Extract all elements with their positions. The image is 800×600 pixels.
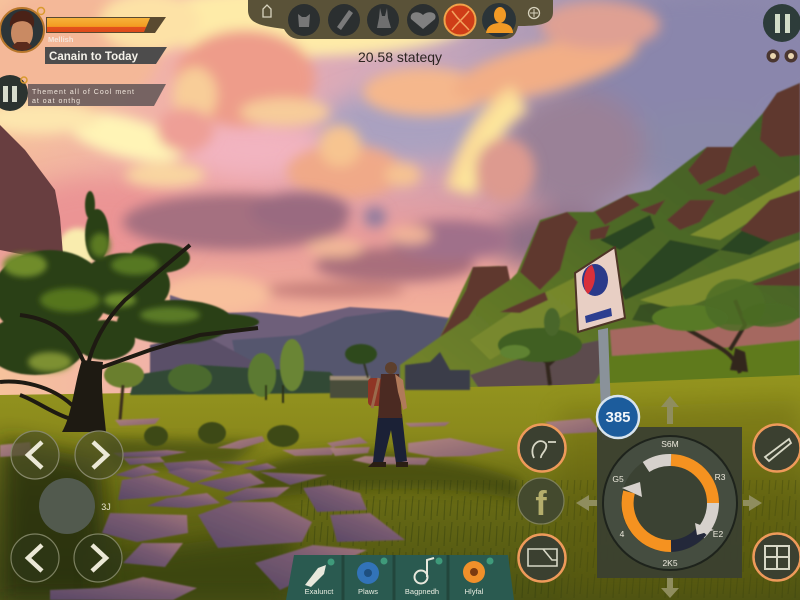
tab: explore (305, 558, 334, 596)
banner (28, 84, 166, 106)
distance marker: 385 (605, 409, 631, 426)
minimap labels: S6M (661, 439, 679, 449)
small tree mid distance (498, 308, 582, 385)
button: map (518, 534, 566, 582)
tab: explore: Exalunct (305, 587, 334, 596)
tab: settings: Hlyfal (465, 587, 484, 596)
icon: rabbit (367, 4, 399, 36)
tab: plans (357, 558, 388, 596)
tree right on hillside (652, 279, 798, 373)
action buttons (518, 424, 800, 582)
pause objective banner (0, 75, 166, 111)
button: gift box (754, 534, 800, 580)
player character (368, 362, 408, 467)
button: f: f (535, 485, 547, 523)
ring: orange upper right (671, 460, 713, 503)
circular minimap panel (597, 427, 742, 578)
icon: profile (482, 3, 516, 37)
distant blue mountains (150, 295, 450, 385)
button: vine (518, 424, 566, 472)
minimap labels: 2K5 (662, 558, 678, 568)
icon: close active (444, 4, 476, 36)
top right pause button (763, 4, 800, 42)
large foreground tree (0, 191, 259, 432)
icon: knife (328, 4, 360, 36)
button: right upper (75, 431, 123, 479)
ring: navy bottom (671, 531, 702, 546)
joystick value: 3J (101, 502, 111, 512)
tab: music (405, 558, 442, 596)
minimap labels: R3 (715, 472, 726, 482)
left rock cliff (0, 125, 63, 260)
ring: grey top (646, 460, 671, 467)
right mountain range (400, 83, 800, 392)
small top right badges (766, 50, 798, 62)
stone path (0, 418, 600, 600)
minimap labels: G5 (612, 474, 624, 484)
icon: plus badge (528, 8, 540, 18)
tab: music: Bagpnedh (405, 587, 439, 596)
grass tufts (144, 422, 299, 447)
virtual d-pad (11, 431, 123, 582)
arrow: grey left (622, 482, 642, 497)
banner: at oat onthg (32, 98, 80, 105)
banner: Thement all of Cool ment (32, 89, 134, 96)
minimap directional arrows (576, 396, 762, 598)
top navigation bar (248, 0, 553, 39)
pause icon left (0, 75, 28, 111)
joystick (39, 478, 95, 534)
foliage dark mass (0, 191, 259, 375)
bottom menu tabs (286, 555, 514, 600)
sky with sunset clouds (0, 0, 800, 400)
button: right lower (74, 534, 122, 582)
sign post (575, 247, 625, 440)
button: left lower (11, 534, 59, 582)
minimap labels: 4 (620, 529, 625, 539)
distance marker (597, 396, 639, 438)
status banner: Canain to Today (49, 51, 139, 63)
portrait (0, 8, 44, 52)
icon: house (263, 5, 271, 17)
icon: shirt (288, 4, 320, 36)
arrow: grey right (695, 523, 714, 535)
minimap labels (612, 439, 726, 568)
player label: Mellish (48, 35, 74, 44)
ring: orange lower left (628, 492, 671, 546)
button: left upper (11, 431, 59, 479)
minimap labels: E2 (713, 529, 723, 539)
center status text: 20.58 stateqy (358, 49, 442, 65)
meadow ground (0, 375, 800, 600)
player portrait with health bars (0, 8, 167, 64)
distant trees and buildings (104, 339, 470, 420)
button: f (518, 478, 564, 524)
button: ruler (754, 424, 800, 472)
foliage leaf highlights (3, 233, 200, 372)
ring: grey right (700, 503, 713, 534)
tab: plans: Plaws (358, 587, 378, 596)
trunk and branches (62, 360, 106, 432)
tab: settings (463, 558, 494, 596)
health bar (46, 17, 166, 33)
icon: heart (407, 4, 439, 36)
status banner (45, 47, 167, 64)
